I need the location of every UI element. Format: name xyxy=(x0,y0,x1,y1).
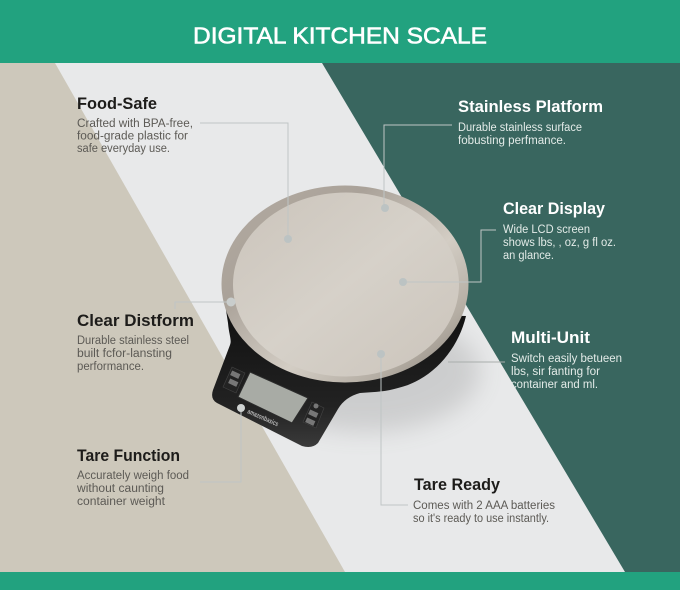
clear distform description: performance. xyxy=(77,361,144,373)
stainless platform heading: Stainless Platform xyxy=(458,98,603,116)
tare function leader xyxy=(200,404,245,482)
food-safe leader xyxy=(200,123,292,243)
clear display description: Wide LCD screen xyxy=(503,224,590,236)
callout: stainless platform xyxy=(381,98,603,212)
stainless platform description: fobusting perfmance. xyxy=(458,135,566,147)
stainless platform description: Durable stainless surface xyxy=(458,122,582,134)
header bar xyxy=(0,0,680,63)
footer bar xyxy=(0,572,680,590)
right buttons xyxy=(303,402,324,428)
tare ready description: so it's ready to use instantly. xyxy=(413,513,549,525)
clear distform description: built fcfor-lansting xyxy=(77,348,172,360)
tare ready heading: Tare Ready xyxy=(414,476,501,494)
callout: tare ready xyxy=(377,350,555,525)
display screen xyxy=(238,372,308,423)
clear distform heading: Clear Distform xyxy=(77,312,194,330)
clear distform description xyxy=(77,335,189,373)
tare function description xyxy=(76,470,189,508)
food-safe description: safe everyday use. xyxy=(77,143,170,155)
multi-unit heading: Multi-Unit xyxy=(511,329,591,347)
tare function heading: Tare Function xyxy=(77,447,180,465)
tare function description: container weight xyxy=(77,496,166,508)
clear distform description: Durable stainless steel xyxy=(77,335,189,347)
clear display description xyxy=(503,224,616,262)
stainless platform leader xyxy=(381,125,452,212)
clear display leader xyxy=(399,230,496,286)
food-safe description: food-grade plastic for xyxy=(77,130,188,142)
tare ready description: Comes with 2 AAA batteries xyxy=(413,500,555,512)
callout: food-safe xyxy=(77,95,292,243)
scale product illustration xyxy=(212,186,480,447)
clear display heading: Clear Display xyxy=(503,200,606,218)
food-safe description: Crafted with BPA-free, xyxy=(77,118,193,130)
tare function description: Accurately weigh food xyxy=(77,470,189,482)
multi-unit leader xyxy=(448,361,505,363)
brand mark: amazonbasics xyxy=(246,408,279,428)
panel: dark green background xyxy=(322,63,680,572)
multi-unit description: lbs, sir fanting for xyxy=(511,366,600,378)
title: DIGITAL KITCHEN SCALE xyxy=(193,22,487,48)
multi-unit description: Switch easily betueen xyxy=(511,353,622,365)
stainless platform description xyxy=(458,122,582,147)
clear distform leader xyxy=(175,298,236,309)
callout: clear distform xyxy=(77,298,236,373)
multi-unit description xyxy=(511,353,622,391)
callout: multi-unit xyxy=(448,329,622,391)
tare ready leader xyxy=(377,350,408,505)
callout: clear display xyxy=(399,200,616,286)
food-safe description xyxy=(77,118,193,155)
left buttons xyxy=(223,367,245,393)
clear display description: an glance. xyxy=(503,250,554,262)
tare function description: without caunting xyxy=(76,483,164,495)
food-safe heading: Food-Safe xyxy=(77,95,157,113)
panel: beige background xyxy=(0,63,345,572)
tare ready description xyxy=(413,500,555,525)
callout: tare function xyxy=(76,404,245,508)
clear display description: shows lbs, , oz, g fl oz. xyxy=(503,237,616,249)
multi-unit description: container and ml. xyxy=(511,379,598,391)
